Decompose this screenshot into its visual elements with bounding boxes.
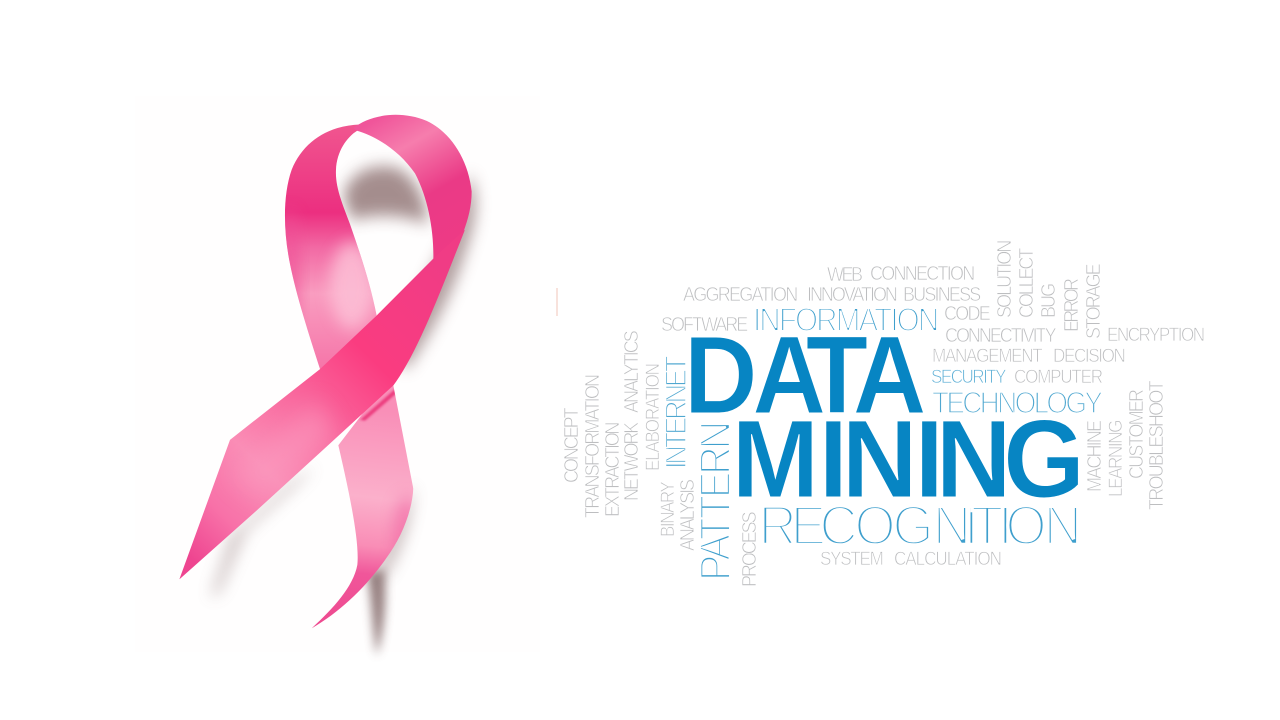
- grey words, vertical: ELABORATION: [642, 363, 663, 471]
- icon: pink awareness ribbon: [170, 115, 476, 655]
- grey words, vertical: CONCEPT: [561, 407, 583, 483]
- grey words, horizontal: SOFTWARE: [661, 314, 748, 336]
- grey words, horizontal: CALCULATION: [894, 548, 1002, 569]
- grey words, vertical: ANALYTICS: [621, 330, 643, 413]
- grey words, vertical: NETWORK: [621, 422, 643, 501]
- ribbon lower tail: [312, 386, 414, 628]
- blue word: RECOGNITION: RECOGNITION: [758, 494, 1082, 557]
- blue word: INTERNET: INTERNET: [660, 356, 693, 469]
- ribbon front band: [170, 224, 470, 587]
- grey words, vertical: EXTRACTION: [602, 422, 624, 517]
- grey words, horizontal: INNOVATION: [807, 284, 898, 306]
- grey words, vertical: CUSTOMER: [1126, 389, 1148, 479]
- grey words, horizontal: MANAGEMENT: [932, 345, 1043, 366]
- grey words, horizontal: ENCRYPTION: [1107, 324, 1205, 345]
- ribbon shadows: [210, 166, 476, 656]
- headline word: DATA: DATA: [684, 314, 926, 437]
- grey words, vertical: STORAGE: [1083, 263, 1105, 339]
- grey words, horizontal: COMPUTER: [1014, 366, 1103, 387]
- blue word: PATTERN: PATTERN: [690, 421, 739, 581]
- grey words, vertical: ANALYSIS: [677, 479, 699, 551]
- ribbon left band: [284, 124, 376, 369]
- grey words, horizontal: WEB: [827, 264, 863, 286]
- grey words, vertical: BUG: [1038, 283, 1060, 318]
- grey words, vertical: PROCESS: [739, 511, 761, 587]
- artefact: faint vertical pink line: [556, 288, 558, 316]
- grey words, vertical: TRANSFORMATION: [582, 374, 604, 518]
- grey words, horizontal: DECISION: [1053, 345, 1126, 366]
- panel: ribbon photo background: [135, 96, 540, 652]
- ribbon top loop: [353, 115, 472, 260]
- grey words, horizontal: [661, 263, 1205, 569]
- grey words, vertical: COLLECT: [1016, 247, 1038, 318]
- grey words, vertical: SOLUTION: [994, 240, 1016, 318]
- headline word: MINING: MINING: [732, 397, 1085, 521]
- grey words, horizontal: CONNECTIVITY: [945, 325, 1057, 347]
- grey words, horizontal: CONNECTION: [870, 263, 975, 285]
- blue word: INFORMATION: INFORMATION: [753, 302, 939, 338]
- blue word: TECHNOLOGY: TECHNOLOGY: [932, 386, 1103, 420]
- grey words, vertical: LEARNING: [1105, 420, 1126, 497]
- grey words, vertical: [561, 240, 1168, 587]
- grey words, vertical: MACHINE: [1084, 420, 1106, 492]
- grey words, vertical: BINARY: [657, 481, 678, 537]
- grey words, vertical: ERROR: [1061, 278, 1083, 332]
- grey words, horizontal: CODE: [944, 303, 991, 325]
- grey words, vertical: TROUBLESHOOT: [1146, 380, 1168, 510]
- blue word: SECURITY: SECURITY: [931, 366, 1007, 387]
- grey words, horizontal: BUSINESS: [903, 284, 981, 306]
- grey words, horizontal: AGGREGATION: [683, 284, 798, 306]
- grey words, horizontal: SYSTEM: [820, 548, 884, 569]
- word cloud: data mining: [561, 240, 1205, 587]
